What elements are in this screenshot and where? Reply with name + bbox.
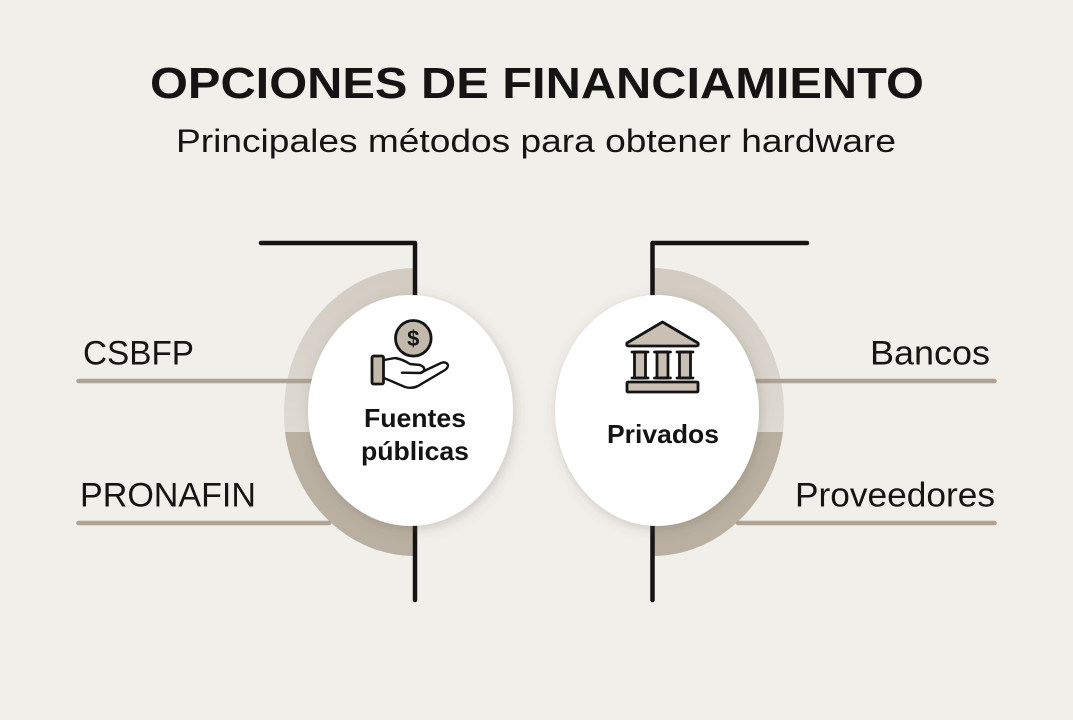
connector: PRONAFIN line — [78, 521, 329, 525]
title: OPCIONES DE FINANCIAMIENTO — [150, 59, 924, 108]
icon: hand holding coin — [372, 320, 448, 388]
connector: CSBFP line — [78, 379, 315, 383]
label: Bancos: Bancos — [870, 334, 990, 372]
label: Fuentes públicas: Fuentes — [364, 403, 466, 433]
label: Privados: Privados — [607, 419, 719, 449]
subtitle: Principales métodos para obtener hardware — [176, 123, 896, 159]
panel: fuentes públicas — [78, 243, 513, 600]
label: Proveedores: Proveedores — [795, 476, 995, 514]
icon: bank building — [627, 322, 698, 392]
label: Fuentes públicas — [361, 403, 469, 466]
connector: black line bottom — [650, 520, 655, 600]
label: CSBFP: CSBFP — [83, 334, 194, 372]
connector: black bracket top — [652, 243, 807, 300]
panel: privados — [555, 243, 995, 600]
connector: Bancos line — [750, 379, 994, 383]
ring: lower dark segment — [285, 432, 415, 556]
ring: upper light segment — [284, 268, 415, 432]
connector: Proveedores line — [738, 521, 994, 525]
label: Fuentes públicas: públicas — [361, 436, 469, 466]
white circle — [555, 295, 759, 526]
white circle — [308, 295, 513, 526]
icon: hand holding coin: $ — [407, 326, 419, 351]
label: PRONAFIN: PRONAFIN — [80, 476, 256, 514]
connector: black bracket top — [261, 243, 415, 300]
ring: lower dark segment — [652, 432, 783, 556]
ring: upper light segment — [652, 268, 784, 432]
connector: black line bottom — [413, 520, 417, 600]
